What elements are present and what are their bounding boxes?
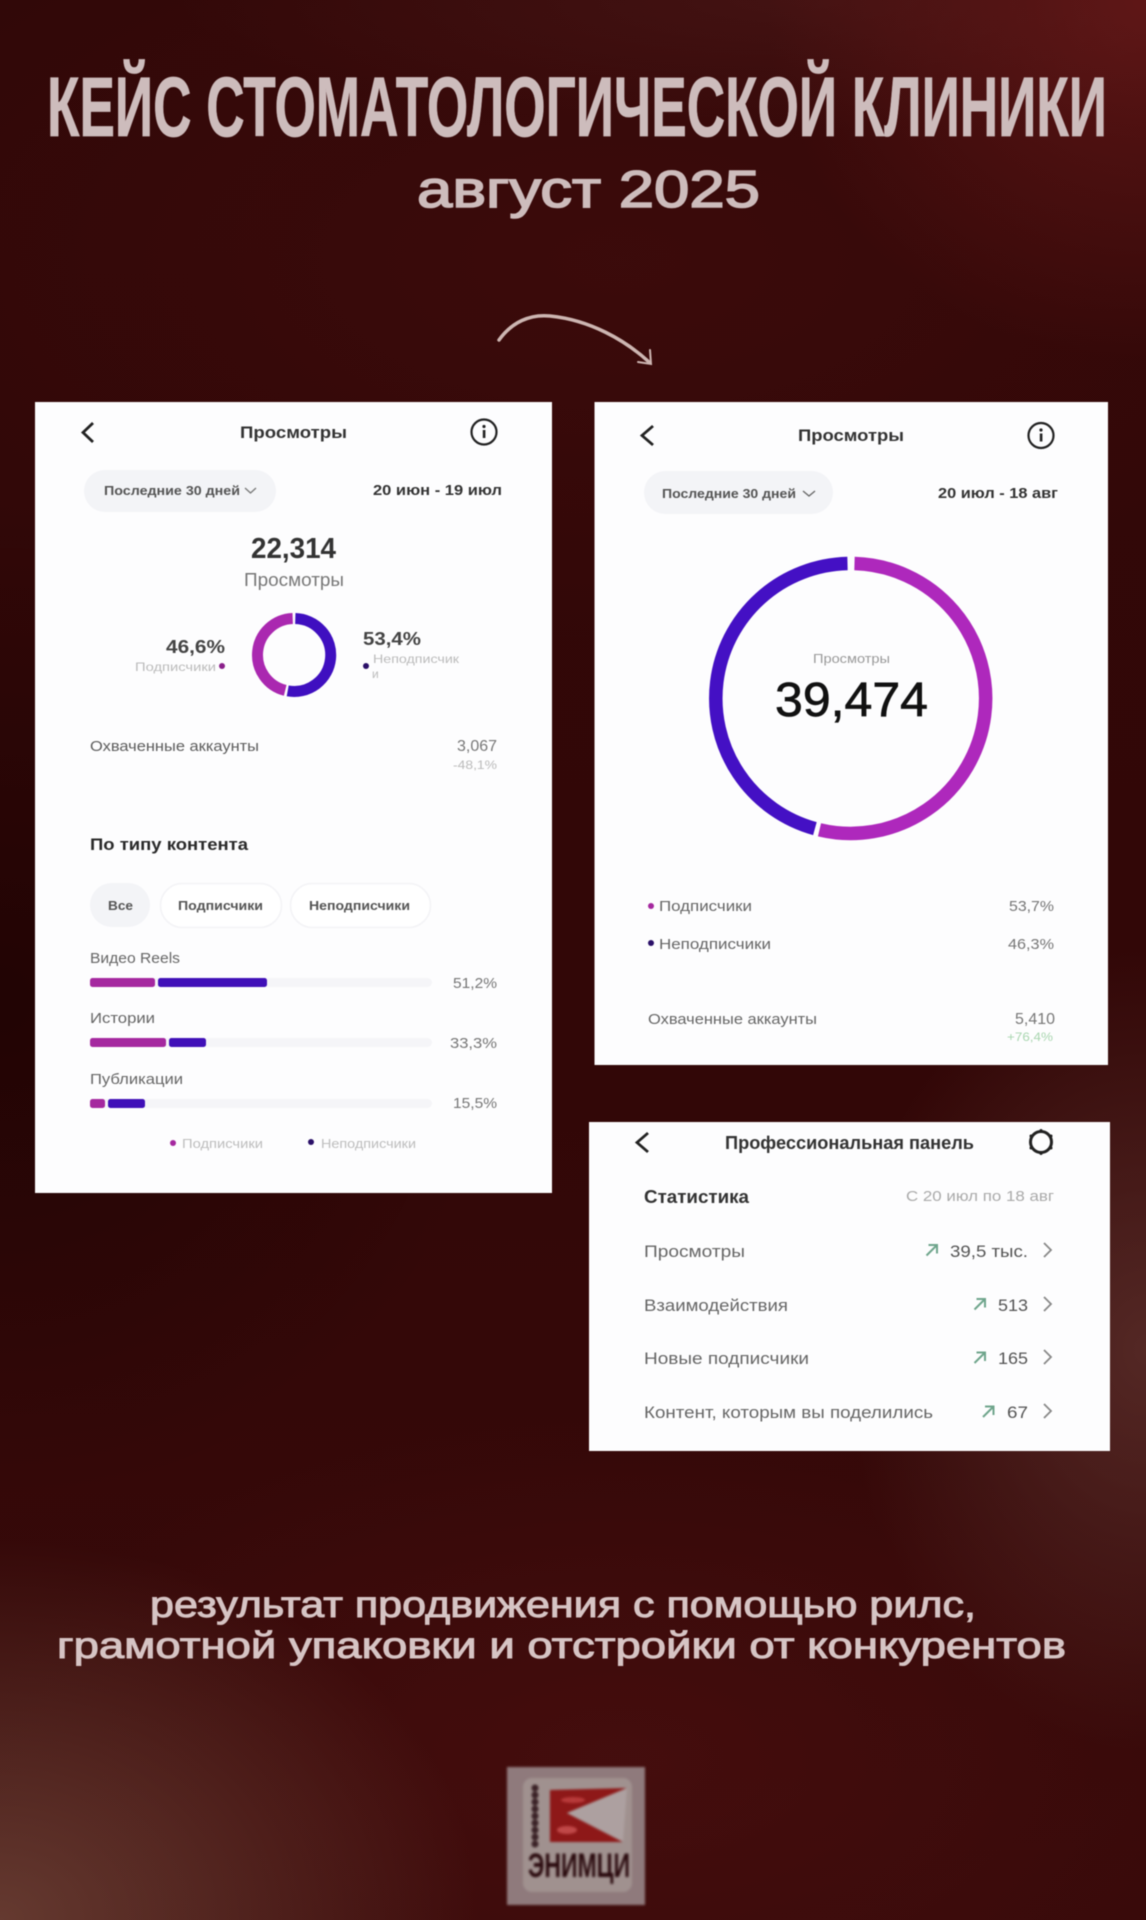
legend row: followers: 53,7%: [1009, 898, 1054, 915]
row: views: 39,5 тыс.: [950, 1242, 1028, 1261]
subtitle: август 2025: [417, 161, 760, 219]
date range: 20 июн - 19 июл: [373, 483, 502, 499]
bar: reels: 51,2%: [453, 975, 497, 992]
followers share: 46,6%: [166, 637, 225, 657]
statistics date range: С 20 июл по 18 авг: [906, 1188, 1055, 1205]
reached accounts: [648, 1011, 1055, 1044]
panel title: Просмотры: [240, 423, 347, 442]
filter pill: all: Все: [108, 899, 133, 913]
non-followers share: Неподписчик: [373, 652, 460, 666]
filter pill: followers: [160, 884, 282, 928]
filter pill: all: [90, 883, 150, 927]
large donut chart: [716, 564, 986, 833]
panel: views June to July: [35, 402, 552, 1193]
legend row: non-followers: 46,3%: [1008, 936, 1054, 953]
icon: info: [1028, 423, 1054, 448]
total views number: 39,474: [775, 674, 928, 727]
arrow: [499, 316, 651, 364]
followers share: [135, 637, 225, 674]
bar: posts: 15,5%: [453, 1095, 497, 1112]
logo: wordmark: ЭНИМЦИ: [528, 1847, 630, 1885]
icon: settings gear: [1030, 1129, 1052, 1155]
icon: back chevron: [637, 1133, 648, 1152]
followers share: Подписчики: [135, 660, 216, 674]
reached accounts: Охваченные аккаунты: [90, 738, 259, 755]
reached accounts: +76,4%: [1007, 1030, 1053, 1044]
icon: back chevron: [642, 426, 653, 445]
bar: stories: [90, 1010, 497, 1052]
row: shared content: Контент, которым вы поделились: [644, 1403, 933, 1422]
bar: reels: [90, 950, 497, 992]
row: interactions: Взаимодействия: [644, 1296, 788, 1315]
bottom caption: [57, 1584, 1066, 1666]
date range: 20 июл - 18 авг: [938, 486, 1058, 502]
period filter pill: Последние 30 дней: [104, 484, 240, 498]
panel: views July to August: [594, 402, 1108, 1065]
legend row: followers: Подписчики: [659, 898, 752, 915]
row: shared content: [644, 1403, 1051, 1422]
statistics heading: Статистика: [644, 1187, 750, 1207]
bar: reels: Видео Reels: [90, 950, 180, 967]
legend row: non-followers: Неподписчики: [659, 936, 771, 953]
non-followers share: [363, 629, 460, 681]
period filter pill: [644, 471, 833, 514]
reached accounts: 3,067: [457, 738, 497, 755]
row: views: Просмотры: [644, 1242, 745, 1261]
row: new followers: Новые подписчики: [644, 1349, 809, 1368]
donut chart: [258, 618, 331, 691]
reached accounts: -48,1%: [453, 758, 497, 772]
filter pill: non-followers: [290, 884, 430, 928]
section heading: by content type: По типу контента: [90, 835, 249, 854]
row: new followers: [644, 1349, 1051, 1368]
legend: [170, 1137, 416, 1151]
legend row: followers: [648, 898, 1054, 915]
row: shared content: 67: [1007, 1403, 1028, 1422]
reached accounts: [90, 738, 497, 772]
row: interactions: 513: [998, 1296, 1028, 1315]
reached accounts: Охваченные аккаунты: [648, 1011, 817, 1028]
row: new followers: 165: [998, 1349, 1028, 1368]
filter pill: followers: Подписчики: [178, 899, 263, 913]
panel: professional dashboard: [589, 1122, 1110, 1451]
panel title: Профессиональная панель: [725, 1133, 974, 1153]
logo: dotted column: [532, 1784, 538, 1848]
filter pill: non-followers: Неподписчики: [309, 899, 410, 913]
non-followers share: и: [372, 667, 379, 681]
total views label: Просмотры: [244, 570, 344, 590]
bottom caption: грамотной упаковки и отстройки от конкурентов: [57, 1625, 1066, 1666]
panel title: Просмотры: [798, 426, 904, 445]
logo: [507, 1767, 645, 1905]
icon: info: [472, 420, 496, 444]
period filter pill: [84, 470, 276, 512]
legend row: non-followers: [648, 936, 1054, 953]
legend: Неподписчики: [321, 1137, 416, 1151]
reached accounts: 5,410: [1015, 1011, 1055, 1028]
icon: back chevron: [83, 423, 93, 442]
period filter pill: Последние 30 дней: [662, 487, 796, 501]
bar: stories: 33,3%: [450, 1035, 497, 1052]
bar: posts: [90, 1071, 497, 1112]
row: interactions: [644, 1296, 1051, 1315]
bar: stories: Истории: [90, 1010, 155, 1027]
bar: posts: Публикации: [90, 1071, 183, 1088]
logo: red emblem: [550, 1788, 627, 1842]
row: views: [644, 1242, 1051, 1261]
total views number: 22,314: [251, 533, 336, 565]
non-followers share: 53,4%: [363, 629, 421, 649]
donut label: Просмотры: [813, 651, 890, 666]
legend: Подписчики: [182, 1137, 263, 1151]
bottom caption: результат продвижения с помощью рилс,: [150, 1584, 976, 1625]
